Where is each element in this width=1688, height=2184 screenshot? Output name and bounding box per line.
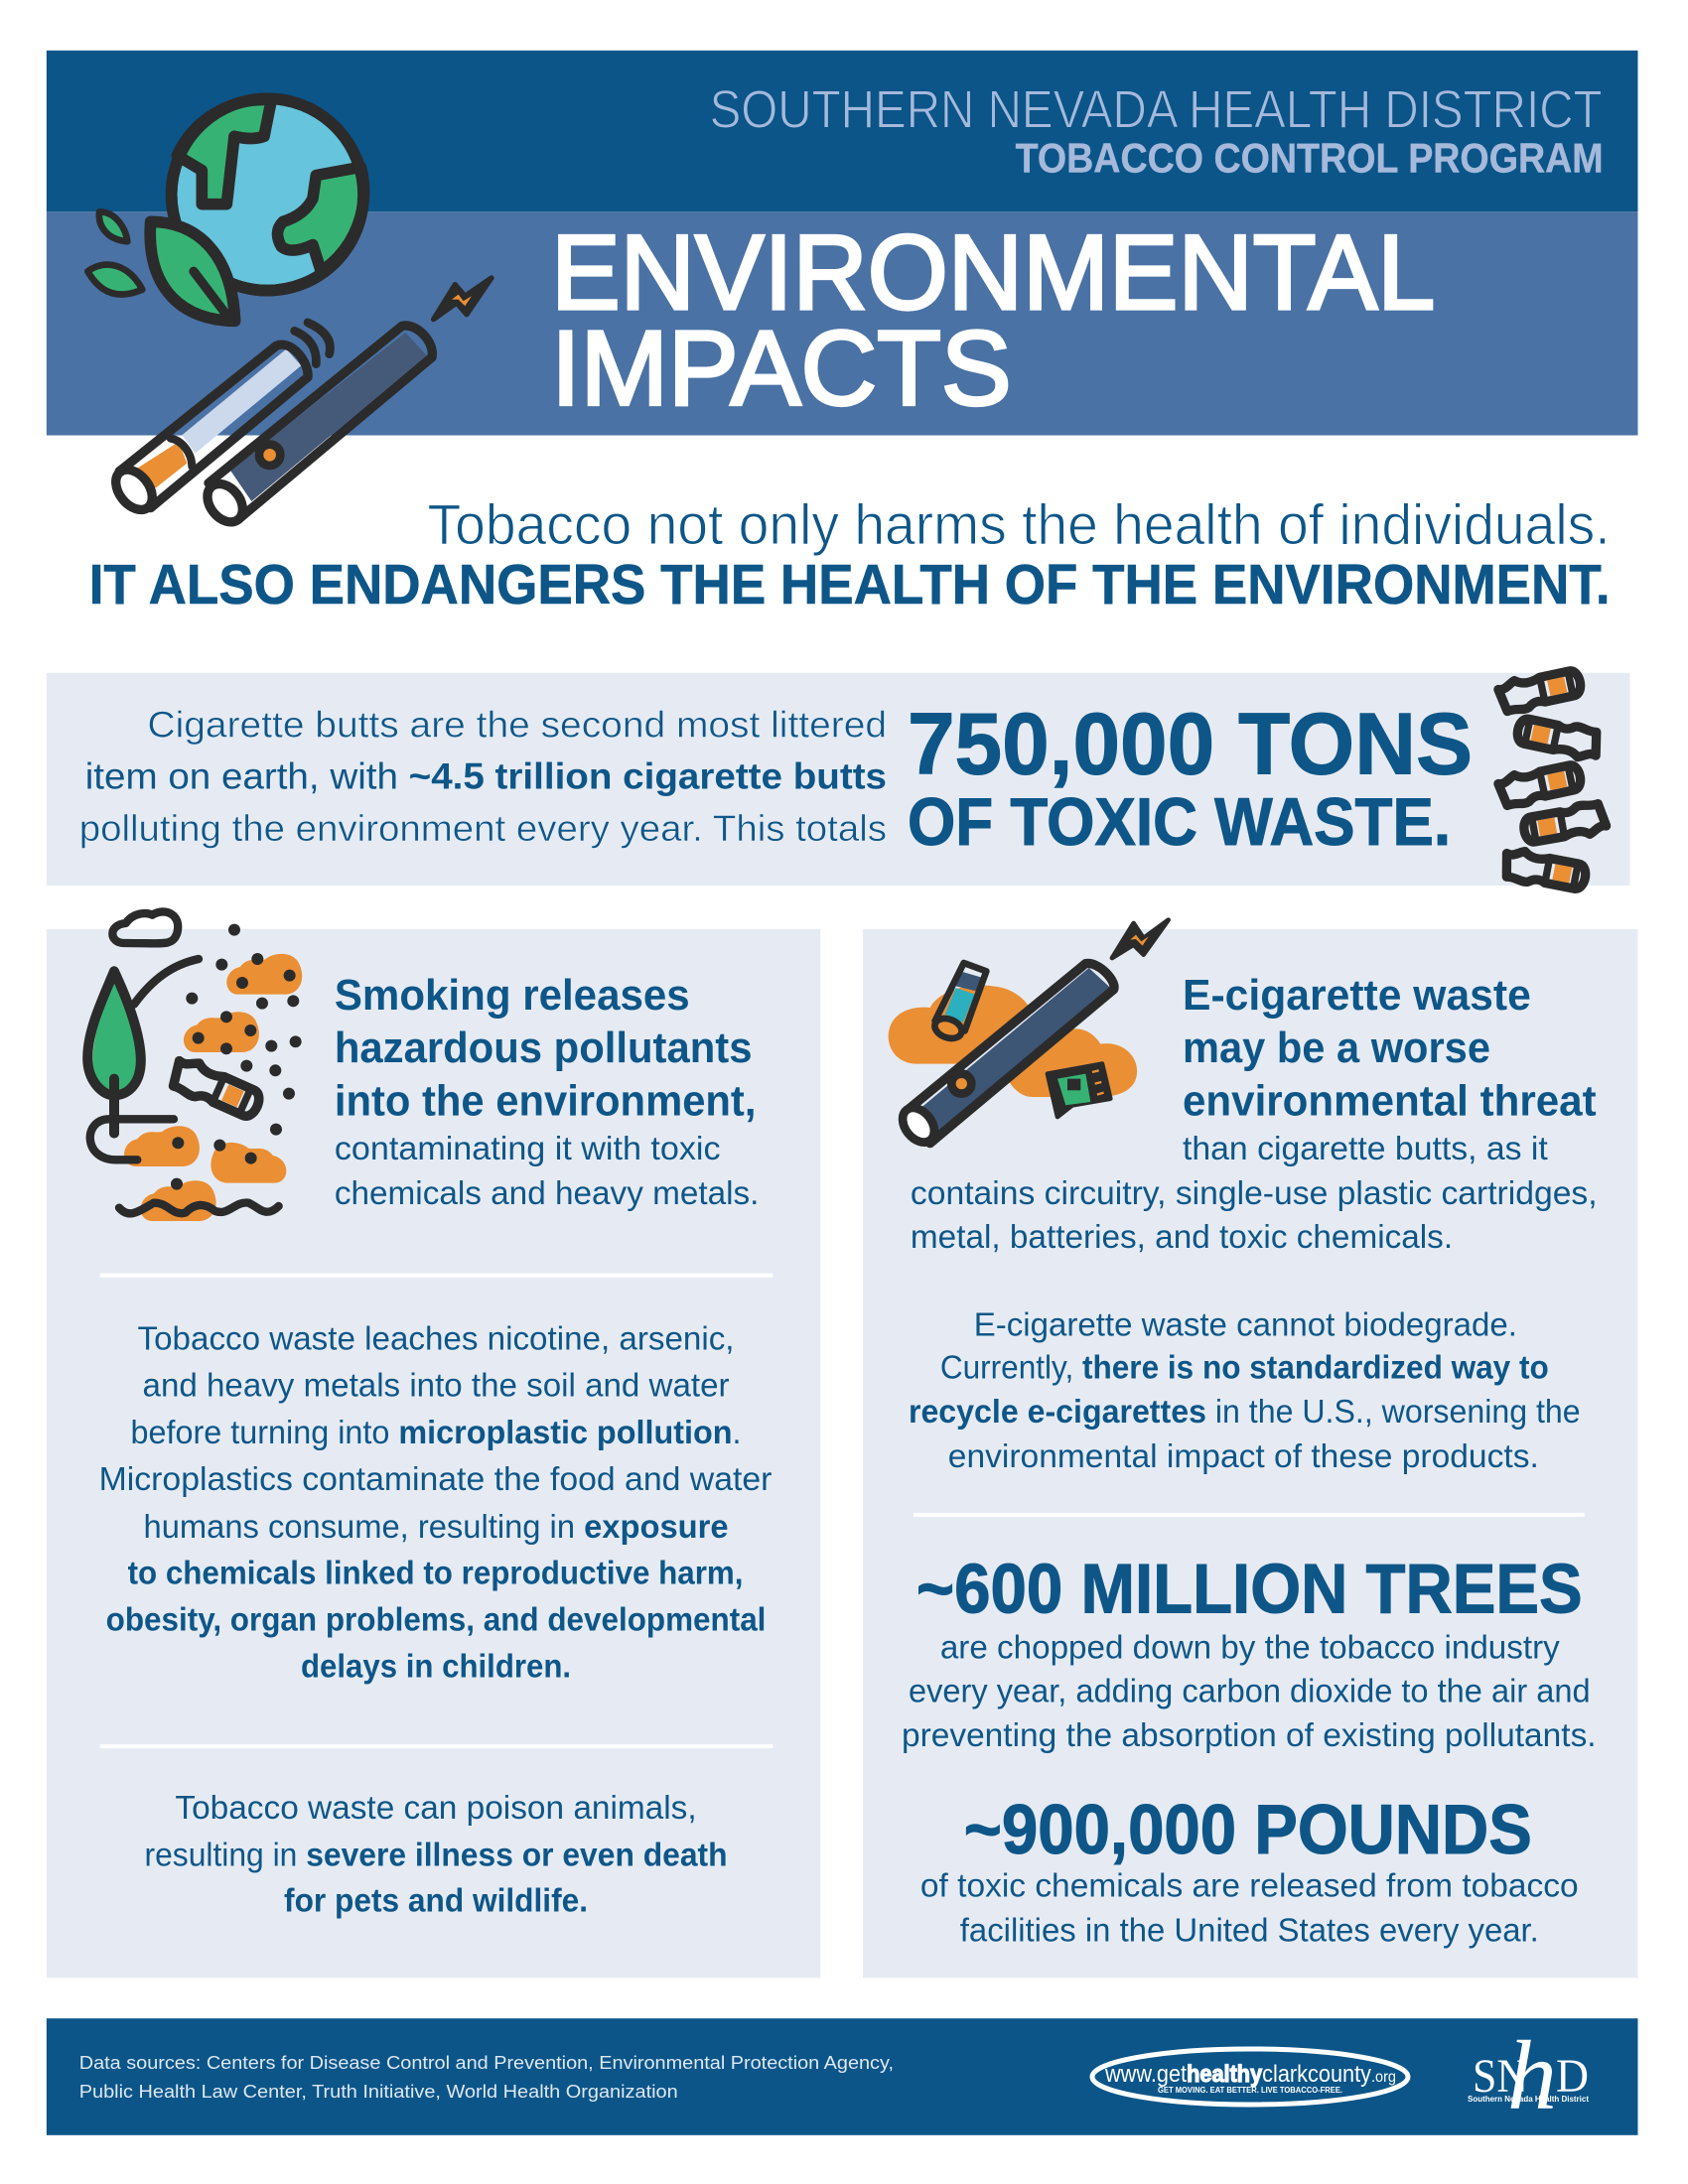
logo: get healthy clark county: www.gethealthyclarkcounty.org	[1104, 2061, 1396, 2088]
statistic: 900,000 pounds: facilities in the United States every year.	[960, 1912, 1539, 1949]
statistic: 900,000 pounds: of toxic chemicals are released from tobacco	[920, 1868, 1579, 1905]
icon: cigarette butts	[1497, 667, 1608, 892]
heading: e-cigarette waste: E-cigarette waste	[1183, 971, 1531, 1020]
panel: e-cigarette waste	[863, 920, 1637, 1978]
title: IMPACTS	[551, 309, 1012, 428]
logo: SNHD: D	[1556, 2050, 1589, 2103]
heading: smoking releases hazardous pollutants: hazardous pollutants	[335, 1024, 752, 1072]
logo: SNHD: SN	[1473, 2050, 1528, 2103]
organisation name: TOBACCO CONTROL PROGRAM	[1016, 134, 1604, 181]
statistic: 600 million trees	[902, 1550, 1597, 1754]
statistic: 600 million trees: are chopped down by the tobacco industry	[940, 1629, 1560, 1666]
panel: cigarette butts statistic	[47, 667, 1630, 892]
heading: e-cigarette waste: contains circuitry, single-use plastic cartridges,	[911, 1175, 1598, 1212]
statistic: 900,000 pounds	[920, 1790, 1579, 1949]
footer	[47, 2018, 1637, 2135]
logo: SNHD: h	[1507, 2020, 1557, 2130]
statistic: 600 million trees: every year, adding carbon dioxide to the air and	[909, 1673, 1591, 1709]
text: tobacco waste leaches: humans consume, resulting in exposure	[144, 1509, 729, 1546]
intro statement: Tobacco not only harms the health of individuals.	[428, 493, 1611, 557]
statistic: 900,000 pounds: ~900,000 POUNDS	[964, 1790, 1532, 1868]
panel: smoking pollutants	[47, 911, 820, 1978]
text: cannot biodegrade: E-cigarette waste cannot biodegrade.	[974, 1306, 1517, 1343]
big number: 750,000 tons: 750,000 TONS	[908, 695, 1473, 792]
data sources	[79, 2052, 894, 2102]
logo: get healthy clark county	[1092, 2049, 1408, 2105]
text: poison animals: Tobacco waste can poison animals,	[175, 1790, 697, 1827]
text: tobacco waste leaches: Microplastics contaminate the food and water	[99, 1461, 772, 1498]
text: tobacco waste leaches: Tobacco waste leaches nicotine, arsenic,	[138, 1320, 735, 1357]
header band	[47, 51, 1637, 436]
heading: e-cigarette waste	[911, 971, 1598, 1256]
text: poison animals: resulting in severe illness or even death	[145, 1838, 728, 1874]
heading: smoking releases hazardous pollutants: Smoking releases	[335, 971, 690, 1020]
butts paragraph	[79, 705, 887, 849]
heading: smoking releases hazardous pollutants: chemicals and heavy metals.	[335, 1175, 759, 1212]
butts paragraph: item on earth, with ~4.5 trillion cigarette butts	[85, 755, 887, 796]
text: cannot biodegrade: Currently, there is no standardized way to	[940, 1349, 1549, 1386]
text: cannot biodegrade	[909, 1306, 1581, 1475]
heading: smoking releases hazardous pollutants	[335, 971, 759, 1212]
logo: get healthy clark county: GET MOVING. EAT BETTER. LIVE TOBACCO-FREE.	[1158, 2086, 1342, 2095]
intro statement	[89, 493, 1611, 616]
text: cannot biodegrade: recycle e-cigarettes in the U.S., worsening the	[909, 1394, 1581, 1431]
text: tobacco waste leaches: delays in children.	[301, 1648, 571, 1685]
heading: e-cigarette waste: environmental threat	[1183, 1077, 1597, 1126]
text: poison animals	[145, 1790, 728, 1920]
text: tobacco waste leaches: obesity, organ problems, and developmental	[106, 1602, 766, 1639]
text: tobacco waste leaches: and heavy metals into the soil and water	[143, 1367, 730, 1404]
butts paragraph: Cigarette butts are the second most littered	[148, 705, 887, 746]
data sources: Public Health Law Center, Truth Initiative, World Health Organization	[79, 2081, 678, 2102]
statistic: 600 million trees: ~600 MILLION TREES	[916, 1550, 1583, 1628]
title: ENVIRONMENTAL	[551, 212, 1435, 332]
butts paragraph: polluting the environment every year. This totals	[79, 808, 887, 849]
big number: 750,000 tons: OF TOXIC WASTE.	[908, 785, 1451, 860]
heading: e-cigarette waste: may be a worse	[1183, 1024, 1490, 1072]
heading: smoking releases hazardous pollutants: into the environment,	[335, 1077, 756, 1126]
big number: 750,000 tons	[908, 695, 1473, 860]
heading: e-cigarette waste: than cigarette butts, as it	[1183, 1131, 1549, 1167]
text: cannot biodegrade: environmental impact of these products.	[948, 1438, 1539, 1475]
text: tobacco waste leaches: before turning into microplastic pollution.	[131, 1415, 742, 1451]
statistic: 600 million trees: preventing the absorption of existing pollutants.	[902, 1717, 1597, 1754]
icon: e-cigarette, cartridge and circuit board	[889, 920, 1169, 1149]
icon: globe, leaves, cigarette and e-cigarette	[87, 98, 492, 529]
heading: smoking releases hazardous pollutants: contaminating it with toxic	[335, 1131, 721, 1167]
organisation name	[710, 80, 1604, 181]
text: tobacco waste leaches	[99, 1320, 772, 1685]
data sources: Data sources: Centers for Disease Control and Prevention, Environmental Protection Agency,	[79, 2052, 894, 2073]
logo: SNHD	[1468, 2020, 1589, 2130]
heading: e-cigarette waste: metal, batteries, and toxic chemicals.	[911, 1219, 1453, 1256]
text: poison animals: for pets and wildlife.	[284, 1883, 588, 1920]
logo: SNHD: Southern Nevada Health District	[1468, 2094, 1589, 2104]
icon: tree, pollution clouds and cigarette butt	[87, 911, 302, 1221]
text: tobacco waste leaches: to chemicals linked to reproductive harm,	[128, 1556, 743, 1592]
intro statement: IT ALSO ENDANGERS THE HEALTH OF THE ENVIRONMENT.	[89, 554, 1611, 616]
title	[551, 212, 1435, 428]
